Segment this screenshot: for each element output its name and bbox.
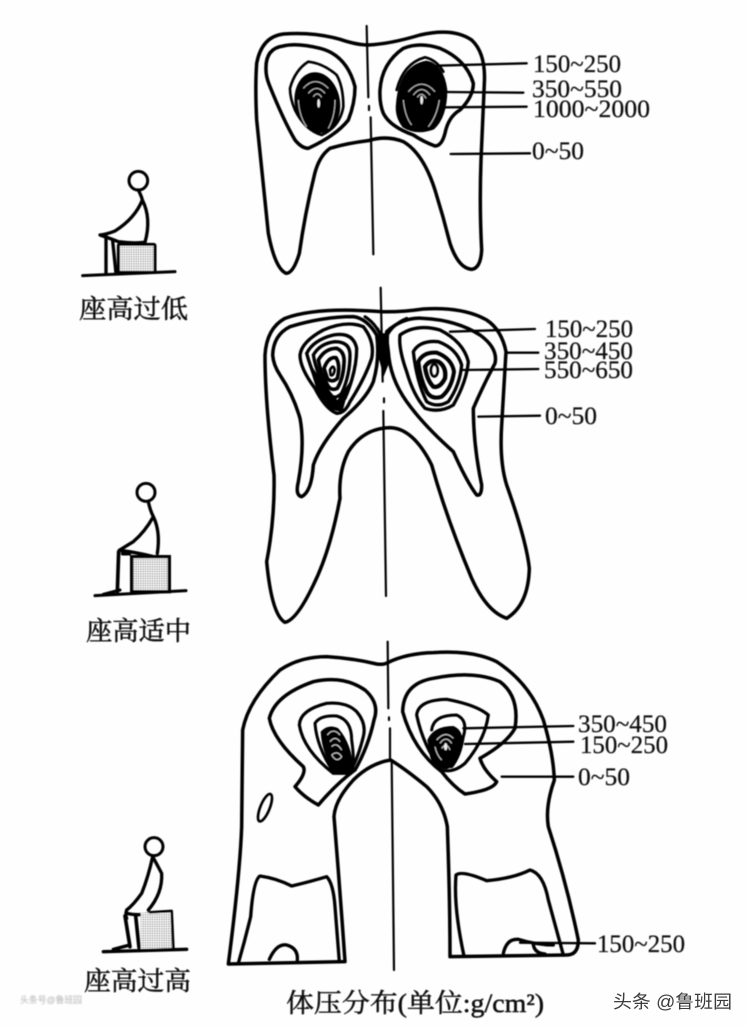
icon: sitter on high stool	[103, 838, 187, 952]
label: 350~450: 350~450	[544, 338, 633, 365]
chart title: body pressure distribution: 体压分布(单位:g/cm²)	[286, 989, 544, 1018]
caption: seat too low: 座高过低	[79, 295, 188, 324]
watermark: author credit: 头条 @鲁班园	[613, 992, 732, 1012]
label: 550~650: 550~650	[544, 357, 633, 384]
label: 0~50: 0~50	[545, 403, 597, 430]
icon: sitter on low stool	[83, 171, 175, 276]
icon: sitter on moderate stool	[95, 483, 186, 596]
label: 150~250: 150~250	[545, 316, 633, 343]
label: 0~50: 0~50	[532, 138, 584, 165]
panel: seat too high pressure map	[228, 642, 685, 970]
label: 0~50: 0~50	[578, 764, 630, 791]
label: 350~450: 350~450	[578, 711, 667, 738]
label: 1000~2000: 1000~2000	[533, 96, 650, 123]
label: 150~250: 150~250	[533, 51, 621, 78]
watermark: faint left source mark: 头条号@鲁班园	[20, 994, 82, 1005]
panel: seat too low pressure map	[256, 26, 650, 273]
label: lower 150~250: 150~250	[597, 931, 685, 958]
label: 150~250: 150~250	[580, 732, 668, 759]
panel: seat height moderate pressure map	[265, 288, 633, 622]
caption: moderate seat height: 座高适中	[86, 617, 191, 646]
contour diagram: seat too high	[228, 642, 595, 970]
contour diagram: seat too low	[256, 26, 530, 273]
caption: seat too high: 座高过高	[84, 967, 191, 996]
contour diagram: moderate seat height	[265, 288, 540, 622]
label: 350~550: 350~550	[532, 76, 622, 103]
